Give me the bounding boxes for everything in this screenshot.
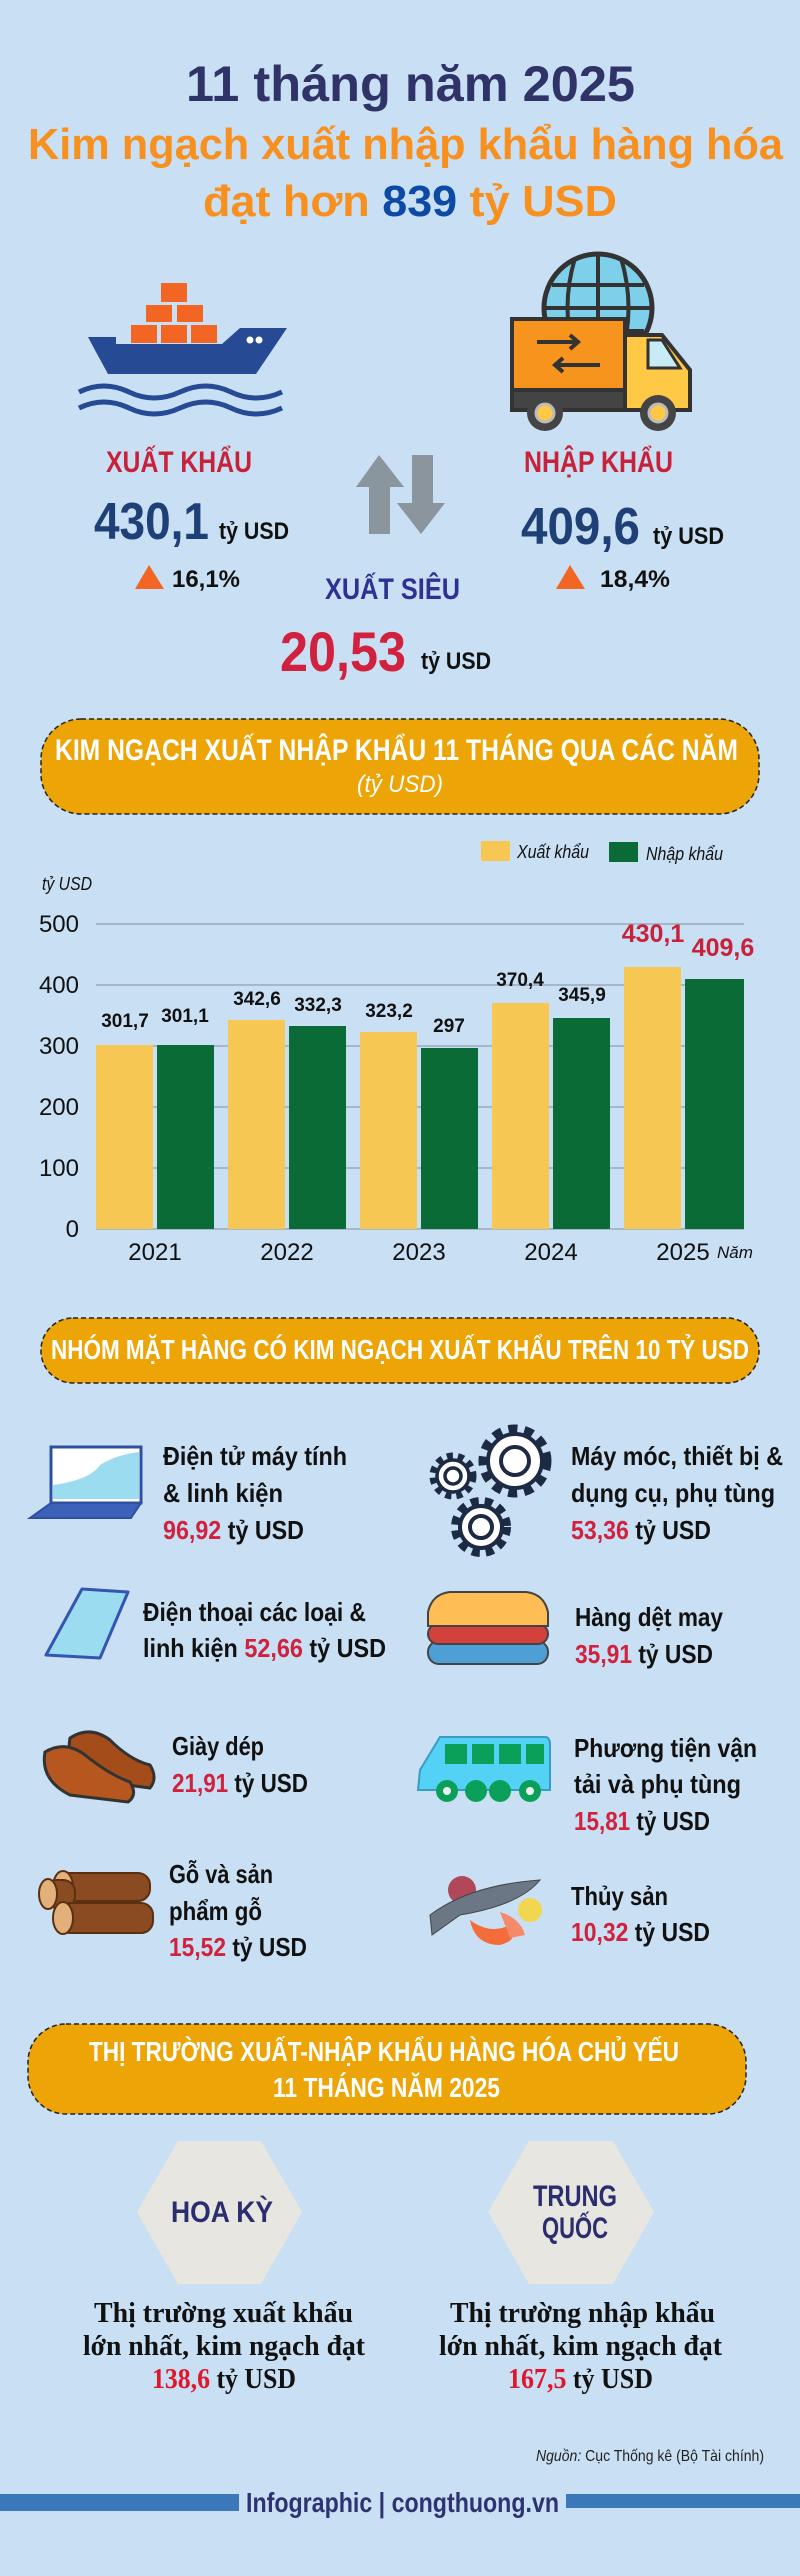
banner: export groups (41, 1318, 759, 1383)
item: electronics: & linh kiện (163, 1478, 283, 1508)
market: United States (83, 2141, 366, 2395)
bar chart: 100 (39, 1155, 79, 1182)
item: vehicles: tải và phụ tùng (574, 1769, 741, 1799)
title: Kim ngạch xuất nhập khẩu hàng hóa (28, 120, 784, 169)
bar chart: 2022 (260, 1239, 314, 1266)
bar chart: 500 (39, 911, 79, 938)
export stats: XUẤT KHẨU (106, 445, 252, 479)
footer: Infographic | congthuong.vn (246, 2487, 559, 2518)
item: electronics (30, 1441, 347, 1545)
banner: main markets: THỊ TRƯỜNG XUẤT-NHẬP KHẨU HÀNG HÓA CHỦ YẾU (89, 2035, 679, 2067)
bar chart: 301,1 (161, 1006, 209, 1027)
export stats: tỷ USD (219, 518, 289, 545)
banner: main markets: 11 THÁNG NĂM 2025 (273, 2072, 500, 2103)
market: China: QUỐC (542, 2211, 608, 2245)
market: China: Thị trường nhập khẩu (450, 2298, 715, 2329)
item: wood: 15,52 tỷ USD (169, 1932, 307, 1962)
bar chart: 0 (66, 1216, 79, 1243)
bar chart: 345,9 (558, 985, 606, 1006)
item: electronics: Điện tử máy tính (163, 1441, 347, 1471)
market: China: 167,5 tỷ USD (508, 2364, 653, 2395)
title: 11 tháng năm 2025 (186, 56, 635, 112)
import stats: NHẬP KHẨU (524, 445, 673, 479)
export stats: 430,1 (94, 493, 209, 551)
market: China (439, 2141, 723, 2395)
legend: Nhập khẩu (646, 844, 723, 864)
market: United States: HOA KỲ (171, 2195, 273, 2229)
item: wood: Gỗ và sản (169, 1859, 273, 1889)
bar chart (39, 841, 754, 1266)
item: wood: phẩm gỗ (169, 1896, 262, 1926)
bar chart: 409,6 (692, 934, 754, 962)
item: footwear: 21,91 tỷ USD (172, 1768, 308, 1798)
legend: Xuất khẩu (516, 842, 589, 862)
import stats (521, 445, 724, 593)
legend (481, 841, 723, 864)
trade surplus: tỷ USD (421, 648, 491, 675)
bar chart: Năm (717, 1243, 753, 1262)
item: vehicles: 15,81 tỷ USD (574, 1806, 710, 1836)
icon: truck with globe (512, 254, 690, 431)
item: phones: linh kiện 52,66 tỷ USD (143, 1633, 386, 1663)
bar chart: 342,6 (233, 989, 281, 1010)
item: electronics: 96,92 tỷ USD (163, 1515, 304, 1545)
bar chart: 400 (39, 972, 79, 999)
title: đạt hơn 839 tỷ USD (203, 177, 617, 226)
banner: chart title (41, 719, 759, 814)
export stats: 16,1% (172, 566, 240, 593)
banner: chart title: (tỷ USD) (357, 771, 443, 798)
item: machinery: dụng cụ, phụ tùng (571, 1478, 775, 1508)
bar chart: 323,2 (365, 1001, 413, 1022)
bar chart: 301,7 (101, 1011, 149, 1032)
item: textiles: Hàng dệt may (575, 1602, 723, 1632)
item: textiles (428, 1592, 723, 1669)
item: footwear (44, 1731, 308, 1802)
export stats (94, 445, 289, 593)
item: footwear: Giày dép (172, 1731, 264, 1761)
banner: main markets (28, 2024, 746, 2114)
bar chart: 300 (39, 1033, 79, 1060)
bar chart: 370,4 (496, 970, 544, 991)
bar chart: 2021 (128, 1239, 182, 1266)
trade surplus: 20,53 (280, 620, 406, 683)
item: textiles: 35,91 tỷ USD (575, 1639, 713, 1669)
item: seafood: 10,32 tỷ USD (571, 1917, 710, 1947)
import stats: 18,4% (600, 566, 670, 593)
market: United States: Thị trường xuất khẩu (94, 2298, 353, 2329)
item: vehicles: Phương tiện vận (574, 1733, 757, 1763)
trade surplus: XUẤT SIÊU (325, 572, 460, 606)
item: phones: Điện thoại các loại & (143, 1597, 366, 1627)
market: United States: lớn nhất, kim ngạch đạt (83, 2331, 366, 2362)
market: United States: 138,6 tỷ USD (152, 2364, 296, 2395)
title (28, 56, 784, 226)
trade surplus (280, 572, 491, 683)
bar chart: 430,1 (622, 920, 684, 948)
item: machinery (433, 1429, 783, 1553)
import stats: 409,6 (521, 498, 640, 556)
item: phones (46, 1589, 386, 1663)
item: seafood (430, 1876, 710, 1947)
bar chart: 332,3 (294, 995, 342, 1016)
item: wood (39, 1859, 307, 1962)
footer (0, 2487, 800, 2518)
import stats: tỷ USD (653, 523, 724, 550)
bar chart: 297 (433, 1016, 465, 1037)
bar chart: 200 (39, 1094, 79, 1121)
icon: up/down arrows (356, 455, 445, 534)
bar chart: 2024 (524, 1239, 578, 1266)
bar chart: 2025 (656, 1239, 710, 1266)
item: vehicles (418, 1733, 757, 1836)
bar chart: 2023 (392, 1239, 446, 1266)
item: machinery: 53,36 tỷ USD (571, 1515, 711, 1545)
market: China: TRUNG (533, 2180, 617, 2213)
bar chart: tỷ USD (42, 874, 92, 894)
icon: cargo ship (79, 283, 287, 414)
market: China: lớn nhất, kim ngạch đạt (439, 2331, 723, 2362)
source note: Nguồn: Cục Thống kê (Bộ Tài chính) (536, 2448, 764, 2465)
item: seafood: Thủy sản (571, 1881, 668, 1911)
